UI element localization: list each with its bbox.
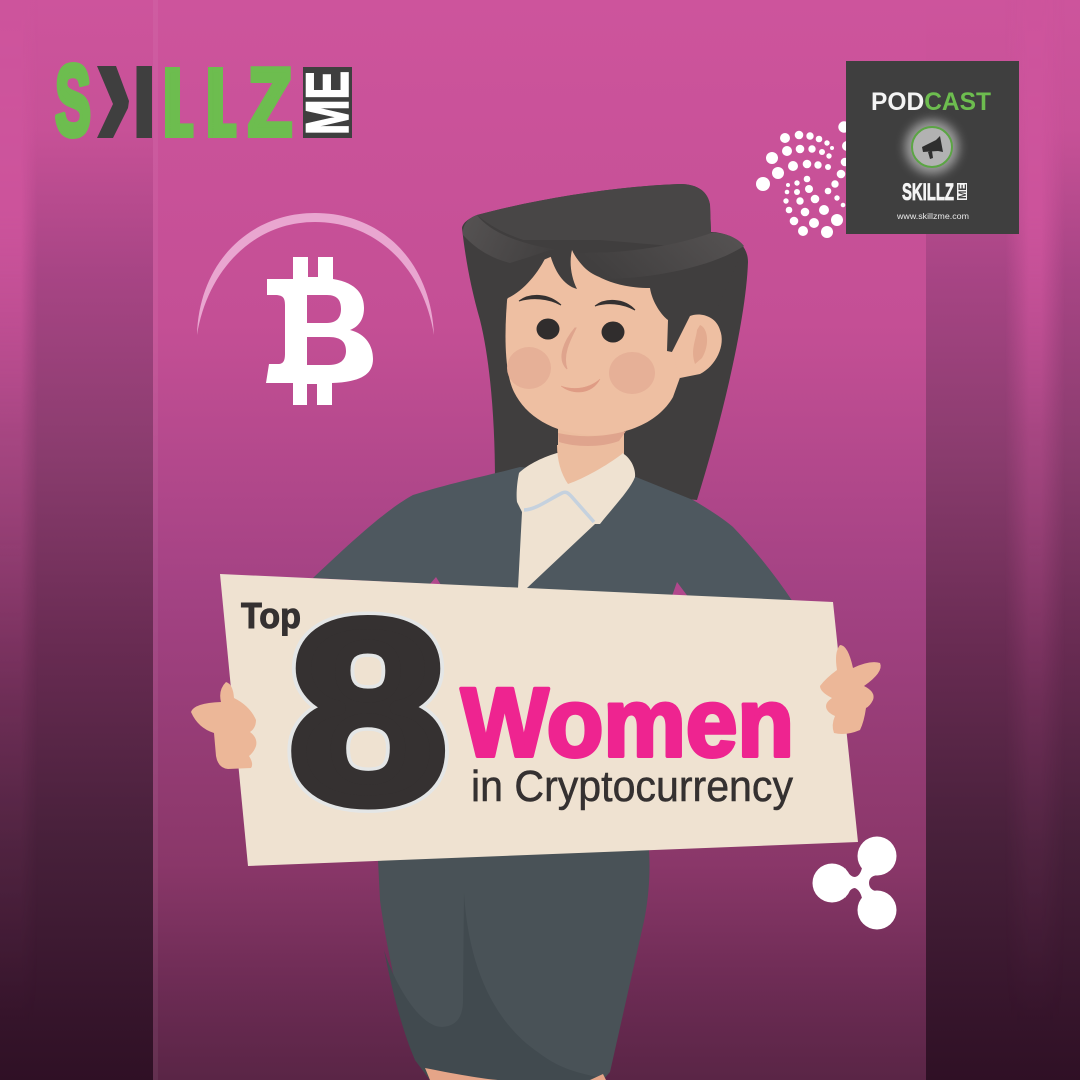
icon: logo chevron — [97, 66, 129, 138]
skirt shading — [384, 893, 603, 1080]
logo: SKILLZ ME — [55, 45, 361, 157]
woman illustration — [313, 184, 793, 1080]
background: right side column — [926, 154, 1080, 1080]
left eyebrow — [519, 295, 561, 305]
logo: SKILLZ ME: Z — [248, 49, 292, 156]
right hand — [820, 645, 881, 734]
icon: ripple — [812, 836, 896, 930]
podcast url: www.skillzme.com — [896, 211, 969, 221]
left cheek — [507, 347, 551, 389]
hair highlight right — [573, 233, 744, 279]
neck front — [557, 445, 624, 484]
skirt — [378, 850, 650, 1080]
left eye — [536, 318, 560, 340]
badge: podcast — [846, 61, 1019, 234]
nose — [562, 328, 576, 369]
legs — [425, 1068, 606, 1080]
right eyebrow — [595, 300, 635, 310]
icon: IOTA dot logo — [756, 121, 852, 238]
logo: SKILLZ ME: L — [210, 50, 237, 157]
right eye — [602, 322, 624, 342]
neck shadow — [558, 431, 626, 446]
podcast heading: PODCAST — [871, 88, 991, 116]
arm gap right — [672, 582, 689, 598]
hair top puff — [477, 184, 711, 252]
podcast mini logo: ME — [957, 184, 969, 199]
icon: bitcoin arc — [197, 213, 434, 335]
background: left side column — [0, 154, 158, 1080]
neck back — [558, 425, 624, 455]
bangs — [480, 240, 742, 352]
right cheek — [609, 352, 655, 394]
hair highlight left — [463, 215, 573, 263]
icon: megaphone — [905, 120, 959, 174]
sign board — [220, 574, 858, 866]
collar line — [524, 492, 594, 522]
left hand — [191, 682, 256, 769]
mouth — [561, 379, 600, 392]
shirt — [517, 453, 635, 588]
logo: SKILLZ ME: S — [55, 45, 91, 157]
heading: Top: Top — [241, 595, 301, 636]
logo: SKILLZ ME: ME — [294, 71, 361, 135]
face — [506, 240, 690, 435]
subheading: in Cryptocurrency: in Cryptocurrency — [471, 762, 793, 811]
heading: Women: Women — [461, 668, 794, 777]
logo: SKILLZ ME: L — [167, 50, 194, 157]
heading: big 8: 8 — [290, 569, 446, 854]
hair back — [462, 184, 748, 500]
podcast mini logo: SKILLZ — [902, 179, 954, 206]
heading: big 8: 8 — [290, 569, 446, 854]
jacket — [313, 467, 793, 602]
arm gap left — [430, 577, 441, 585]
ear — [672, 315, 722, 378]
icon: bitcoin — [266, 257, 373, 405]
